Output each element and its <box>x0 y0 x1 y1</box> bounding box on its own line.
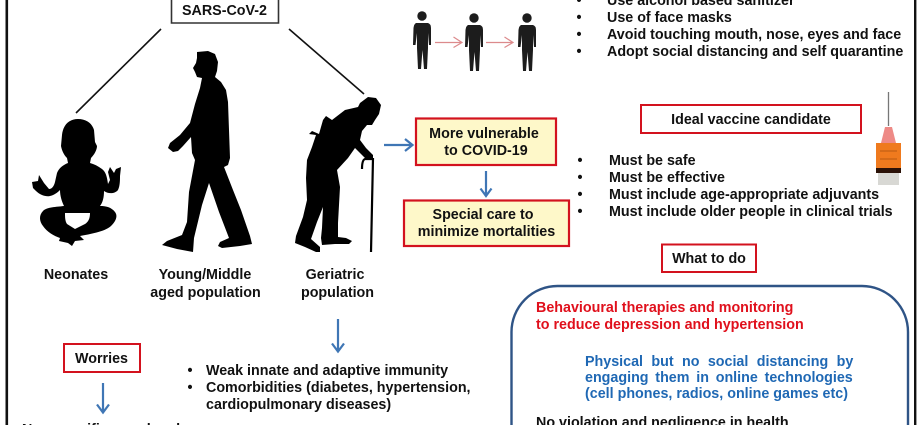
label: young/middle aged population: aged population <box>150 285 261 301</box>
icon: person 1 <box>413 11 431 69</box>
text: behavioural therapies: to reduce depression and hypertension <box>536 317 804 333</box>
list: vaccine requirements: • <box>578 153 583 169</box>
list: risk factors: Comorbidities (diabetes, hypertension, <box>206 380 471 396</box>
icon: person to person transmission <box>413 11 536 71</box>
label: geriatric population: population <box>301 285 374 301</box>
arrow: vulnerable to special care <box>480 171 492 196</box>
callout: special care: Special care to <box>433 207 534 223</box>
SARS-CoV-2 box: SARS-CoV-2 <box>182 3 267 19</box>
label: geriatric population: Geriatric <box>306 267 364 283</box>
list: vaccine requirements <box>578 153 893 220</box>
icon: person 2 <box>465 13 483 71</box>
label: neonates: Neonates <box>44 267 108 283</box>
list: risk factors: • <box>188 380 193 396</box>
text: physical distancing <box>585 354 853 402</box>
list: risk factors <box>188 363 471 413</box>
list: preventive measures: • <box>576 27 582 43</box>
connector lines <box>76 29 364 113</box>
list: preventive measures: • <box>576 10 582 26</box>
arrow: transmission 1 <box>435 37 462 48</box>
arrow: geriatric to risk factors <box>332 319 344 352</box>
SARS-CoV-2 box <box>172 0 278 23</box>
label: young/middle aged population <box>150 267 261 301</box>
list: vaccine requirements: Must include older people in clinical trials <box>609 204 893 220</box>
list: risk factors: Weak innate and adaptive immunity <box>206 363 448 379</box>
list: risk factors: cardiopulmonary diseases) <box>206 397 391 413</box>
icon: walking adult silhouette <box>162 51 252 252</box>
text: behavioural therapies <box>536 300 804 333</box>
label: young/middle aged population: Young/Middle <box>159 267 251 283</box>
list: preventive measures: Adopt social distancing and self quarantine <box>607 44 903 60</box>
callout: more vulnerable: to COVID-19 <box>444 143 528 159</box>
heading: worries <box>64 344 140 372</box>
icon: neonate silhouette <box>32 119 121 246</box>
heading: ideal vaccine candidate: Ideal vaccine candidate <box>671 112 831 128</box>
list: vaccine requirements: • <box>578 170 583 186</box>
icon: syringe <box>876 92 901 185</box>
list: vaccine requirements: Must be safe <box>609 153 696 169</box>
list: risk factors: • <box>188 363 193 379</box>
list: preventive measures: • <box>576 44 582 60</box>
text: physical distancing: engaging them in online technologies <box>585 370 853 386</box>
text: behavioural therapies: Behavioural therapies and monitoring <box>536 300 793 316</box>
heading: ideal vaccine candidate <box>641 105 861 133</box>
text: physical distancing: (cell phones, radios, online games etc) <box>585 386 848 402</box>
callout: special care: minimize mortalities <box>418 224 555 240</box>
list: vaccine requirements: Must be effective <box>609 170 725 186</box>
callout: special care <box>404 200 569 246</box>
list: preventive measures <box>576 0 903 60</box>
arrow: transmission 2 <box>486 37 513 48</box>
panel: what to do actions <box>512 286 908 425</box>
icon: elderly person with cane silhouette <box>295 97 381 252</box>
list: vaccine requirements: Must include age-appropriate adjuvants <box>609 187 879 203</box>
list: preventive measures: Avoid touching mouth, nose, eyes and face <box>607 27 901 43</box>
list: preventive measures: Use of face masks <box>607 10 732 26</box>
heading: worries: Worries <box>75 351 128 367</box>
arrow: worries to text <box>97 383 109 412</box>
list: vaccine requirements: • <box>578 204 583 220</box>
text: physical distancing: Physical but no social distancing by <box>585 354 853 370</box>
list: vaccine requirements: • <box>578 187 583 203</box>
heading: what to do <box>662 244 756 272</box>
icon: person 3 <box>518 13 536 71</box>
label: geriatric population <box>301 267 374 301</box>
callout: more vulnerable <box>416 118 556 165</box>
heading: what to do: What to do <box>672 251 746 267</box>
arrow: geriatric to vulnerable <box>384 139 412 151</box>
callout: more vulnerable: More vulnerable <box>429 126 539 142</box>
